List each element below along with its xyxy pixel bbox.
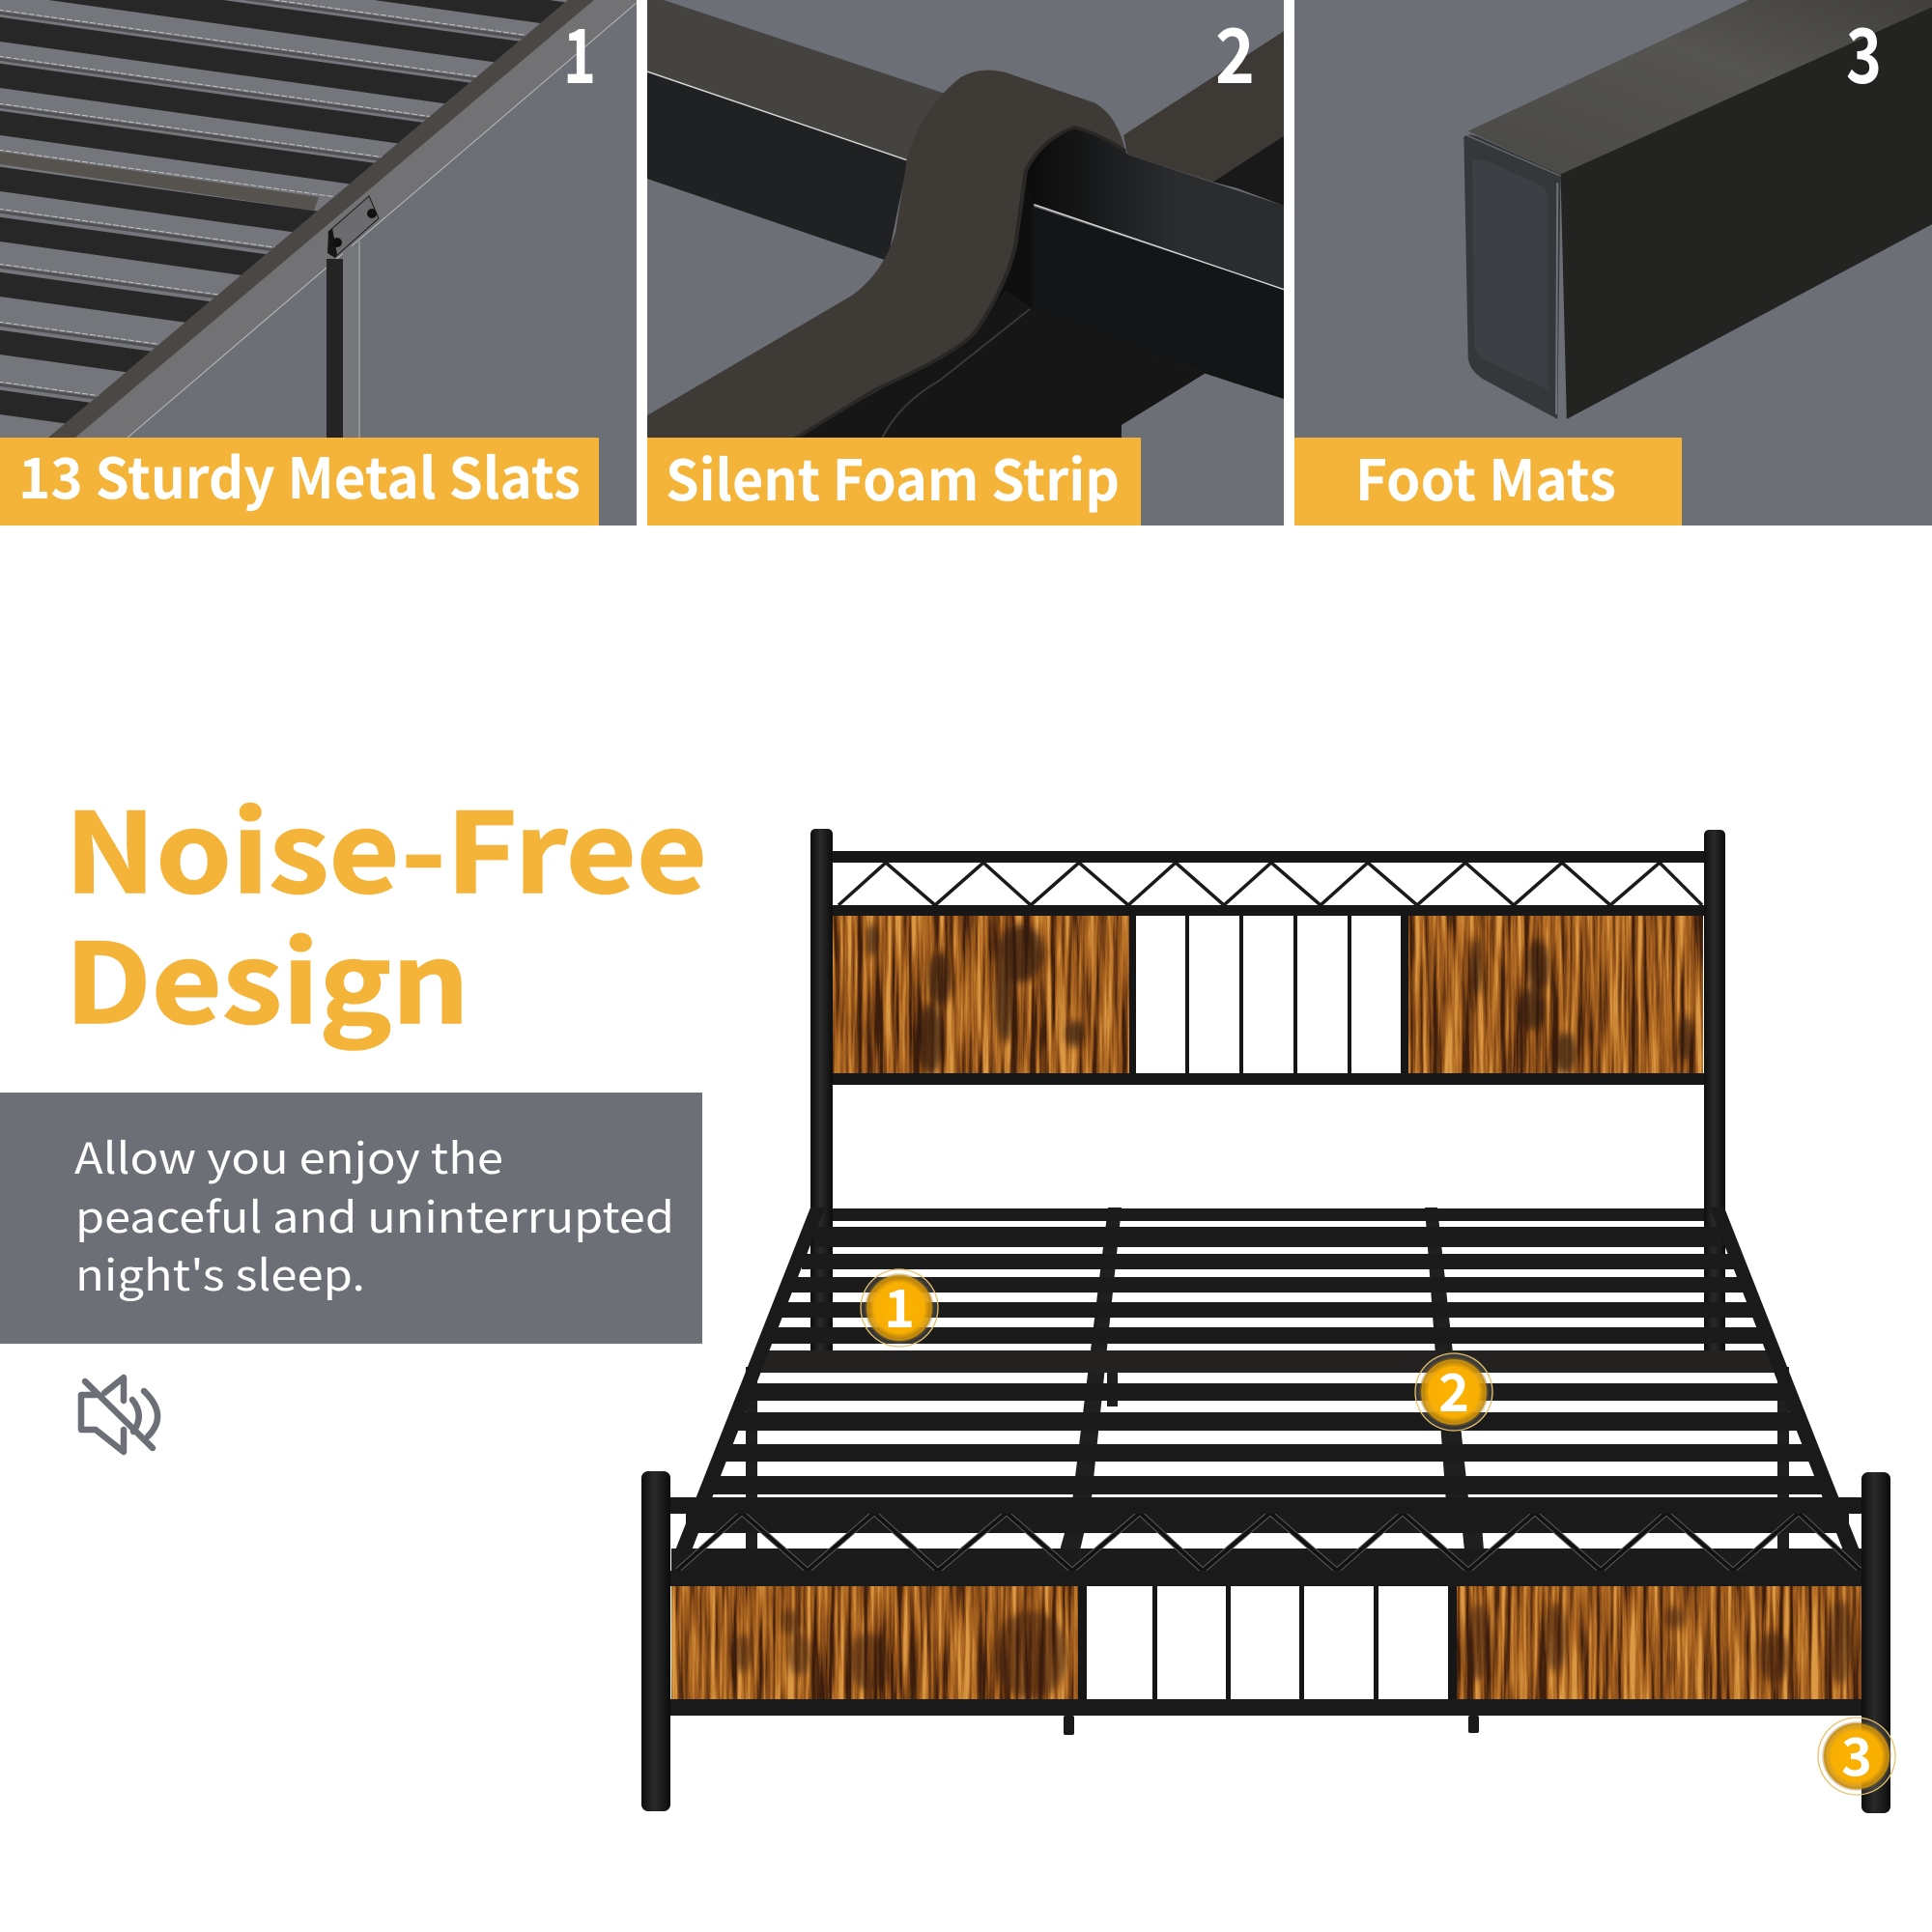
wood panels footboard — [671, 1586, 1861, 1699]
headboard — [810, 829, 1725, 1361]
label: Silent Foam Strip: Silent Foam Strip — [666, 436, 1120, 517]
title: Noise-Free — [65, 765, 707, 924]
panel number 3: 3 — [1846, 0, 1882, 105]
panel: silent foam strip — [647, 0, 1285, 526]
lattice headboard — [838, 863, 1702, 905]
badge 3 — [1818, 1715, 1895, 1795]
badge 2 — [1415, 1350, 1492, 1431]
bed base with slats — [671, 1208, 1861, 1571]
center bars headboard — [1129, 916, 1408, 1074]
badge 1 — [861, 1266, 938, 1347]
icon: muted speaker — [81, 1378, 157, 1452]
bed frame illustration — [641, 829, 1890, 1813]
panel: sturdy metal slats — [0, 0, 676, 526]
label: Foot Mats — [1294, 436, 1682, 526]
panel: foot mats — [1294, 0, 1932, 526]
description panel — [0, 1093, 702, 1344]
description panel: Allow you enjoy the — [74, 1124, 503, 1186]
wood panels headboard — [833, 916, 1703, 1074]
title: Design — [65, 895, 469, 1055]
panel number 1: 1 — [563, 0, 596, 105]
description panel: peaceful and uninterrupted — [75, 1183, 674, 1245]
badge 1: 1 — [884, 1266, 915, 1343]
footboard — [641, 1471, 1890, 1813]
label: Foot Mats: Foot Mats — [1355, 436, 1616, 517]
center bars footboard — [1078, 1586, 1457, 1699]
label: 13 Sturdy Metal Slats: 13 Sturdy Metal Slats — [18, 434, 581, 515]
description panel: night's sleep. — [75, 1241, 365, 1303]
badge 2: 2 — [1438, 1350, 1469, 1427]
title — [65, 765, 707, 1055]
lattice footboard — [677, 1513, 1861, 1571]
badge 3: 3 — [1841, 1715, 1872, 1791]
panel number 2: 2 — [1215, 0, 1255, 105]
